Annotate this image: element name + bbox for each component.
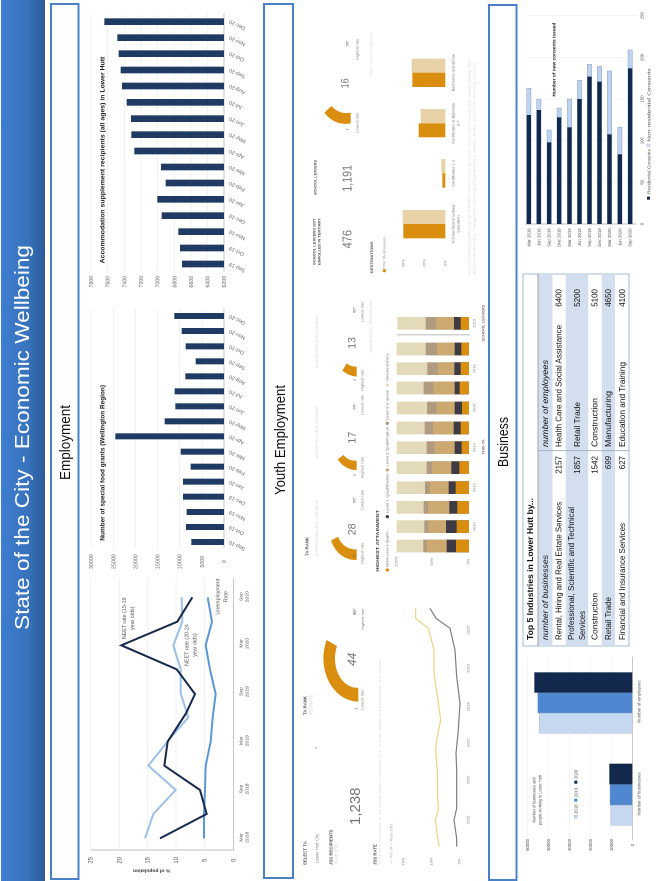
- NCEA gauges and highest attainment stacked bars: 100%: [393, 556, 398, 567]
- chart: accommodation supplement recipients: Oct-20: [228, 50, 245, 62]
- chart: businesses and employees: [525, 657, 642, 851]
- NCEA gauges and highest attainment stacked bars: 2019: [471, 318, 476, 328]
- school leavers block with destinations chart: [312, 31, 476, 275]
- chart: businesses and employees: 2020: [573, 769, 578, 779]
- chart: new consents issued: Number of new consents issued: [552, 23, 557, 97]
- chart: businesses and employees: Number of businesses: [637, 772, 642, 816]
- school leavers block with destinations chart: SCHOOL LEAVERS ENROLLED IN TERTIARY refers to loans, allowances, formal provider-based study, industry training, Maori: [467, 58, 471, 275]
- chart: NEET and unemployment rate lines: 2020: [245, 638, 251, 649]
- JSS recipients block and rate line chart: 2017: [466, 737, 471, 747]
- chart: accommodation supplement recipients: Sep-20: [228, 67, 246, 79]
- chart: special food grants: Oct-19: [228, 524, 245, 536]
- chart: businesses and employees: 30000: [567, 838, 572, 851]
- school leavers block with destinations chart: 1,191: [340, 165, 355, 192]
- chart: accommodation supplement recipients: Jun-20: [228, 115, 246, 128]
- JSS recipients block and rate line chart: Lowest rate: [359, 689, 364, 710]
- chart: special food grants: [89, 308, 247, 569]
- JSS recipients block and rate line chart: 1: [353, 707, 358, 710]
- chart: NEET and unemployment rate lines: 0: [231, 858, 237, 862]
- chart: special food grants: Oct-20: [228, 343, 245, 355]
- chart: new consents issued: 50: [639, 179, 644, 185]
- school leavers block with destinations chart: ENROLLED IN TERTIARY: [317, 218, 322, 265]
- JSS recipients block and rate line chart: 66*: [352, 608, 357, 615]
- table: top 5 industries: 4100: [618, 288, 627, 307]
- chart: accommodation supplement recipients: Accommodation supplement recipients (all ages) in Lower Hutt: [99, 56, 106, 263]
- NCEA gauges and highest attainment stacked bars: Highest rate: [359, 542, 364, 564]
- school leavers block with destinations chart: 476: [340, 230, 355, 248]
- NCEA gauges and highest attainment stacked bars: 2018: [471, 363, 476, 373]
- chart: NEET and unemployment rate lines: 10: [174, 856, 180, 864]
- chart: accommodation supplement recipients: May-20: [228, 131, 247, 144]
- school leavers block with destinations chart: 40%: [401, 259, 406, 267]
- chart: special food grants: 25000: [111, 554, 117, 569]
- NCEA gauges and highest attainment stacked bars: 2014: [471, 442, 476, 452]
- school leavers block with destinations chart: 0%: [442, 260, 447, 266]
- chart: special food grants: 30000: [89, 554, 95, 569]
- chart: accommodation supplement recipients: 7400: [122, 276, 128, 288]
- chart: accommodation supplement recipients: 6800: [172, 276, 178, 288]
- table: top 5 industries: Professional, Scientific and Technical: [567, 507, 576, 640]
- chart: special food grants: Jul-20: [228, 388, 244, 400]
- chart: NEET and unemployment rate lines: 15: [146, 856, 152, 864]
- school leavers block with destinations chart: Bachelors and above: [451, 53, 456, 91]
- chart: businesses and employees: Number of employees: [637, 680, 642, 723]
- JSS recipients block and rate line chart: — This TA — Rest of NZ: [390, 823, 394, 863]
- NCEA gauges and highest attainment stacked bars: 66*: [351, 307, 356, 313]
- table: top 5 industries: Education and Training: [618, 362, 627, 447]
- NCEA gauges and highest attainment stacked bars: TA RANK: [305, 536, 310, 556]
- chart: new consents issued: Mar 2020: [607, 228, 612, 247]
- chart: new consents issued: Non-residential Consents: [646, 68, 651, 142]
- chart: new consents issued: Dec 2019: [597, 228, 602, 247]
- school leavers block with destinations chart: SCHOOL LEAVERS NOT: [312, 218, 317, 265]
- table: top 5 industries: 6400: [555, 288, 564, 307]
- chart: businesses and employees: 10000: [609, 838, 614, 851]
- chart: businesses and employees: 2019: [573, 787, 578, 797]
- chart: accommodation supplement recipients: 7800: [89, 276, 95, 288]
- school leavers block with destinations chart: DESTINATIONS: [369, 241, 374, 273]
- heading: employment: Employment: [58, 405, 74, 480]
- chart: accommodation supplement recipients: Dec-19: [228, 212, 246, 225]
- school leavers block with destinations chart: education: [456, 215, 461, 233]
- school leavers block with destinations chart: 1: [345, 127, 350, 130]
- chart: new consents issued: Residential Consents: [646, 149, 651, 194]
- chart: NEET and unemployment rate lines: 2019: [245, 686, 251, 697]
- chart: accommodation supplement recipients: Sep-19: [228, 261, 246, 273]
- NCEA gauges and highest attainment stacked bars: Highest rate: [359, 456, 364, 478]
- chart: NEET and unemployment rate lines: Sep: [238, 592, 244, 601]
- JSS recipients block and rate line chart: 5%: [456, 858, 461, 865]
- school leavers block with destinations chart: SCHOOL LEAVERS: [312, 160, 317, 195]
- table: top 5 industries: Manufacturing: [604, 391, 613, 447]
- chart: NEET and unemployment rate lines: Mar: [238, 639, 244, 648]
- school leavers block with destinations chart: Not enrolled in tertiary: [451, 205, 456, 243]
- chart: special food grants: Sep-19: [228, 539, 246, 552]
- chart: accommodation supplement recipients: 7600: [106, 276, 112, 288]
- chart: new consents issued: 100: [639, 136, 644, 144]
- chart: special food grants: 15000: [156, 554, 162, 569]
- chart: NEET and unemployment rate lines: 2018: [245, 832, 251, 843]
- chart: NEET and unemployment rate lines: 2018: [245, 783, 251, 795]
- JSS recipients block and rate line chart: [303, 608, 471, 866]
- chart: special food grants: Feb-20: [228, 464, 246, 476]
- NCEA gauges and highest attainment stacked bars: 13: [346, 337, 358, 349]
- table: top 5 industries: [523, 274, 629, 646]
- chart: NEET and unemployment rate lines: Sep: [238, 784, 244, 793]
- chart: NEET and unemployment rate lines: year olds): [192, 633, 198, 657]
- JSS recipients block and rate line chart: 10%: [428, 857, 433, 866]
- panel: employment: [51, 4, 251, 879]
- panel: business: [489, 5, 651, 880]
- JSS recipients block and rate line chart: Highest rate: [360, 608, 365, 630]
- chart: special food grants: Number of special food grants (Wellington Region): [100, 385, 107, 541]
- NCEA gauges and highest attainment stacked bars: Lowest rate: [359, 301, 364, 322]
- table: top 5 industries: 627: [618, 455, 627, 469]
- NCEA gauges and highest attainment stacked bars: Highest rate: [359, 369, 364, 391]
- NCEA gauges and highest attainment stacked bars: Below Level 1 Qualific...: [386, 528, 390, 567]
- NCEA gauges and highest attainment stacked bars: Lowest rate: [359, 394, 364, 415]
- chart: NEET and unemployment rate lines: 25: [88, 856, 94, 864]
- chart: new consents issued: Jun 2020: [617, 228, 622, 246]
- stacked bar group captions: SCHOOL LEAVERS: [480, 304, 486, 342]
- NCEA gauges and highest attainment stacked bars: 1: [351, 378, 356, 381]
- NCEA gauges and highest attainment stacked bars: 28: [346, 523, 358, 535]
- school leavers block with destinations chart: 16: [339, 78, 351, 88]
- school leavers block with destinations chart: This TA All leavers: [383, 236, 387, 268]
- chart: new consents issued: Sep 2019: [587, 228, 592, 247]
- table: top 5 industries: Retail Trade: [573, 401, 582, 447]
- JSS recipients block and rate line chart: 2019: [466, 663, 471, 673]
- NCEA gauges and highest attainment stacked bars: 0%: [466, 558, 471, 565]
- JSS recipients block and rate line chart: 2018: [466, 701, 471, 711]
- NCEA gauges and highest attainment stacked bars: HIGHEST ATTAINMENT: [375, 510, 380, 572]
- chart: NEET and unemployment rate lines: 2020: [245, 591, 251, 602]
- NCEA gauges and highest attainment stacked bars: 17: [346, 432, 358, 444]
- chart: new consents issued: Mar 2019: [567, 228, 572, 247]
- NCEA gauges and highest attainment stacked bars: 50%: [429, 557, 434, 566]
- JSS recipients block and rate line chart: 15%: [401, 857, 406, 866]
- chart: NEET and unemployment rate lines: % of population: [133, 867, 170, 873]
- school leavers block with destinations chart: Apprenticeships, Targeted training programmes within three years of leaving school.: [472, 62, 476, 275]
- JSS recipients block and rate line chart: 18-24 YRS: [333, 844, 338, 865]
- chart: accommodation supplement recipients: Feb-20: [228, 180, 246, 192]
- NCEA gauges and highest attainment stacked bars: 66*: [351, 403, 356, 410]
- chart: special food grants: May-20: [228, 418, 247, 431]
- chart: special food grants: Dec-20: [228, 313, 246, 326]
- chart: new consents issued: Mar 2018: [526, 228, 531, 247]
- table: top 5 industries: Health Care and Social Assistance: [555, 324, 564, 447]
- chart: new consents issued: 0: [639, 222, 644, 225]
- chart: NEET and unemployment rate lines: 20: [117, 856, 123, 864]
- chart: accommodation supplement recipients: [89, 13, 247, 288]
- chart: new consents issued: Dec 2018: [557, 228, 562, 247]
- chart: accommodation supplement recipients: Jul-20: [228, 99, 244, 110]
- table: top 5 industries: Financial and Insurance Services: [618, 523, 627, 640]
- JSS recipients block and rate line chart: 2016: [466, 775, 471, 784]
- school leavers block with destinations chart: 20%: [421, 259, 426, 267]
- chart: new consents issued: Jun 2018: [536, 228, 541, 246]
- chart: accommodation supplement recipients: Nov-19: [228, 228, 246, 241]
- table: top 5 industries: Retail Trade: [604, 596, 613, 640]
- chart: NEET and unemployment rate lines: Sep: [238, 687, 244, 696]
- chart: special food grants: 5000: [200, 556, 206, 568]
- NCEA gauges and highest attainment stacked bars: *CENSUS USUALLY RESIDENT AREA: [369, 300, 373, 353]
- chart: accommodation supplement recipients: 6600: [189, 276, 195, 288]
- table: top 5 industries: number of employees: [541, 360, 550, 447]
- JSS recipients block and rate line chart: 1,238: [347, 787, 364, 825]
- table: top 5 industries: Construction: [591, 398, 600, 447]
- chart: NEET and unemployment rate lines: NEET rate (15-19: [122, 597, 128, 639]
- JSS recipients block and rate line chart: TA RANK: [303, 695, 308, 715]
- chart: new consents issued: 150: [639, 95, 644, 103]
- JSS recipients block and rate line chart: Lower Hutt City: [314, 833, 319, 863]
- table: top 5 industries: 4650: [604, 288, 613, 307]
- chart: NEET and unemployment rate lines: Mar: [238, 833, 244, 842]
- NCEA gauges and highest attainment stacked bars: Lowest rate: [359, 489, 364, 510]
- JSS recipients block and rate line chart: ∨: [313, 746, 318, 749]
- chart: new consents issued: Jun 2019: [577, 228, 582, 246]
- chart: businesses and employees: people working in Lower Hutt: [537, 774, 542, 825]
- NCEA gauges and highest attainment stacked bars: 66*: [351, 497, 356, 503]
- chart: businesses and employees: 0: [630, 843, 635, 846]
- 100% stack: cream, taupe, tan, dark, orange: [397, 317, 470, 552]
- chart: special food grants: 10000: [178, 554, 184, 569]
- header banner with title: [1, 0, 45, 881]
- JSS recipients block and rate line chart: 2015: [466, 815, 471, 824]
- chart: accommodation supplement recipients: 6400: [206, 276, 212, 288]
- chart: special food grants: Dec-19: [228, 494, 246, 506]
- header banner with title: State of the City - Economic Wellbeing: [12, 245, 34, 630]
- NCEA gauges and highest attainment stacked bars: 1: [351, 473, 356, 476]
- chart: new consents issued: Sep 2018: [547, 228, 552, 247]
- NCEA gauges and highest attainment stacked bars: [305, 300, 476, 572]
- chart: special food grants: Mar-20: [228, 449, 246, 461]
- table: top 5 industries: 5100: [591, 288, 600, 307]
- chart: special food grants: Sep-20: [228, 358, 246, 371]
- NCEA gauges and highest attainment stacked bars: 2012: [471, 482, 476, 492]
- school leavers block with destinations chart: *CENSUS USUALLY RESIDENT AREA: [370, 31, 374, 77]
- chart: accommodation supplement recipients: Jan-20: [228, 196, 246, 208]
- chart: special food grants: 20000: [133, 554, 139, 569]
- table: top 5 industries: Rental, Hiring and Real Estate Services: [555, 502, 564, 640]
- chart: NEET and unemployment rate lines: 5: [203, 858, 209, 862]
- table: top 5 industries: 1857: [573, 455, 582, 474]
- chart: accommodation supplement recipients: Aug-20: [228, 83, 246, 95]
- chart: special food grants: Jun-20: [228, 403, 246, 416]
- chart: special food grants: Jan-20: [228, 479, 246, 491]
- heading: youth employment: Youth Employment: [273, 385, 289, 495]
- chart: NEET and unemployment rate lines: 2019: [245, 735, 251, 746]
- chart: special food grants: Apr-20: [228, 433, 245, 445]
- chart: accommodation supplement recipients: Nov-20: [228, 34, 246, 47]
- table: top 5 industries: 1542: [591, 455, 600, 474]
- chart: businesses and employees: 50000: [525, 838, 530, 851]
- school leavers block with destinations chart: 3-7: [456, 120, 461, 126]
- chart: new consents issued: Sep 2020: [628, 228, 633, 247]
- chart: accommodation supplement recipients: Dec-20: [228, 18, 246, 31]
- table: top 5 industries: Services: [578, 611, 587, 640]
- table: top 5 industries: Top 5 Industries in Lower Hutt by...: [526, 498, 535, 640]
- chart: special food grants: Aug-20: [228, 373, 246, 386]
- JSS recipients block and rate line chart: JSS Rate is the number of Job Seeker Support recipients 18 to 24 years divided by the population 18 to 24 years: [377, 658, 382, 865]
- table: top 5 industries: Construction: [591, 593, 600, 640]
- chart: NEET and unemployment rate lines: [88, 578, 251, 873]
- chart: businesses and employees: Number of businesses and: [531, 777, 536, 822]
- chart: accommodation supplement recipients: Oct-19: [228, 245, 245, 257]
- chart: new consents issued: 250: [639, 11, 644, 19]
- school leavers block with destinations chart: Certificates 1-2: [451, 159, 456, 187]
- school leavers block with destinations chart: 66*: [345, 40, 350, 46]
- chart: businesses and employees: 2018: [573, 804, 578, 814]
- chart: special food grants: Nov-19: [228, 509, 246, 522]
- NCEA gauges and highest attainment stacked bars: ACHIEVED NCEA LEVEL 3 OR ABOVE: [315, 315, 319, 368]
- chart: special food grants: Nov-20: [228, 328, 246, 341]
- stacked bar group captions: THIS TA: [480, 439, 486, 455]
- chart: NEET and unemployment rate lines: Unemployment: [215, 578, 221, 615]
- JSS recipients block and rate line chart: 44: [345, 652, 359, 666]
- table: top 5 industries: 5200: [573, 288, 582, 307]
- JSS recipients block and rate line chart: SELECT TA: [303, 840, 308, 865]
- table: top 5 industries: 2157: [555, 455, 564, 474]
- stacked bar group captions: [480, 304, 486, 455]
- NCEA gauges and highest attainment stacked bars: Level 2 Qualification: [386, 427, 390, 467]
- NCEA gauges and highest attainment stacked bars: ACHIEVED NCEA LEVEL 1 OR ABOVE: [315, 500, 319, 557]
- chart: new consents issued: 200: [639, 53, 644, 61]
- table: top 5 industries: 699: [604, 455, 613, 469]
- NCEA gauges and highest attainment stacked bars: 2016: [471, 403, 476, 412]
- NCEA gauges and highest attainment stacked bars: Level 1 Qualification: [386, 473, 390, 513]
- JSS recipients block and rate line chart: JSS RECIPIENTS: [328, 830, 333, 865]
- school leavers block with destinations chart: Lowest rate: [354, 112, 359, 133]
- chart: NEET and unemployment rate lines: Rate: [223, 591, 229, 602]
- chart: new consents issued: [525, 11, 651, 247]
- school leavers block with destinations chart: Highest rate: [354, 38, 359, 60]
- chart: NEET and unemployment rate lines: year olds): [130, 606, 136, 630]
- chart: accommodation supplement recipients: 6200: [222, 276, 228, 288]
- JSS recipients block and rate line chart: 2020: [466, 625, 471, 634]
- chart: accommodation supplement recipients: Mar-20: [228, 164, 246, 176]
- chart: accommodation supplement recipients: 7200: [139, 276, 145, 288]
- panel: youth employment: [264, 4, 486, 878]
- table: top 5 industries: number of businesses: [541, 555, 550, 640]
- JSS recipients block and rate line chart: JSS RATE: [308, 695, 313, 715]
- heading: business: Business: [496, 417, 512, 467]
- chart: accommodation supplement recipients: Apr-20: [228, 148, 245, 160]
- chart: special food grants: 0: [222, 560, 228, 563]
- chart: NEET and unemployment rate lines: Mar: [238, 736, 244, 745]
- chart: businesses and employees: 40000: [546, 838, 551, 851]
- NCEA gauges and highest attainment stacked bars: 1: [351, 554, 356, 557]
- school leavers block with destinations chart: Certificates & diplomas: [451, 103, 456, 144]
- chart: accommodation supplement recipients: 7000: [156, 276, 162, 288]
- NCEA gauges and highest attainment stacked bars: Level 3 or above: [386, 390, 390, 420]
- NCEA gauges and highest attainment stacked bars: ACHIEVED NCEA LEVEL 2 OR ABOVE: [315, 406, 319, 458]
- NCEA gauges and highest attainment stacked bars: University Entrance: [386, 353, 390, 382]
- chart: NEET and unemployment rate lines: NEET rate (20-24: [184, 624, 190, 666]
- NCEA gauges and highest attainment stacked bars: 2010: [471, 521, 476, 531]
- JSS recipients block and rate line chart: JSS RATE: [373, 844, 378, 865]
- chart: businesses and employees: 20000: [588, 838, 593, 851]
